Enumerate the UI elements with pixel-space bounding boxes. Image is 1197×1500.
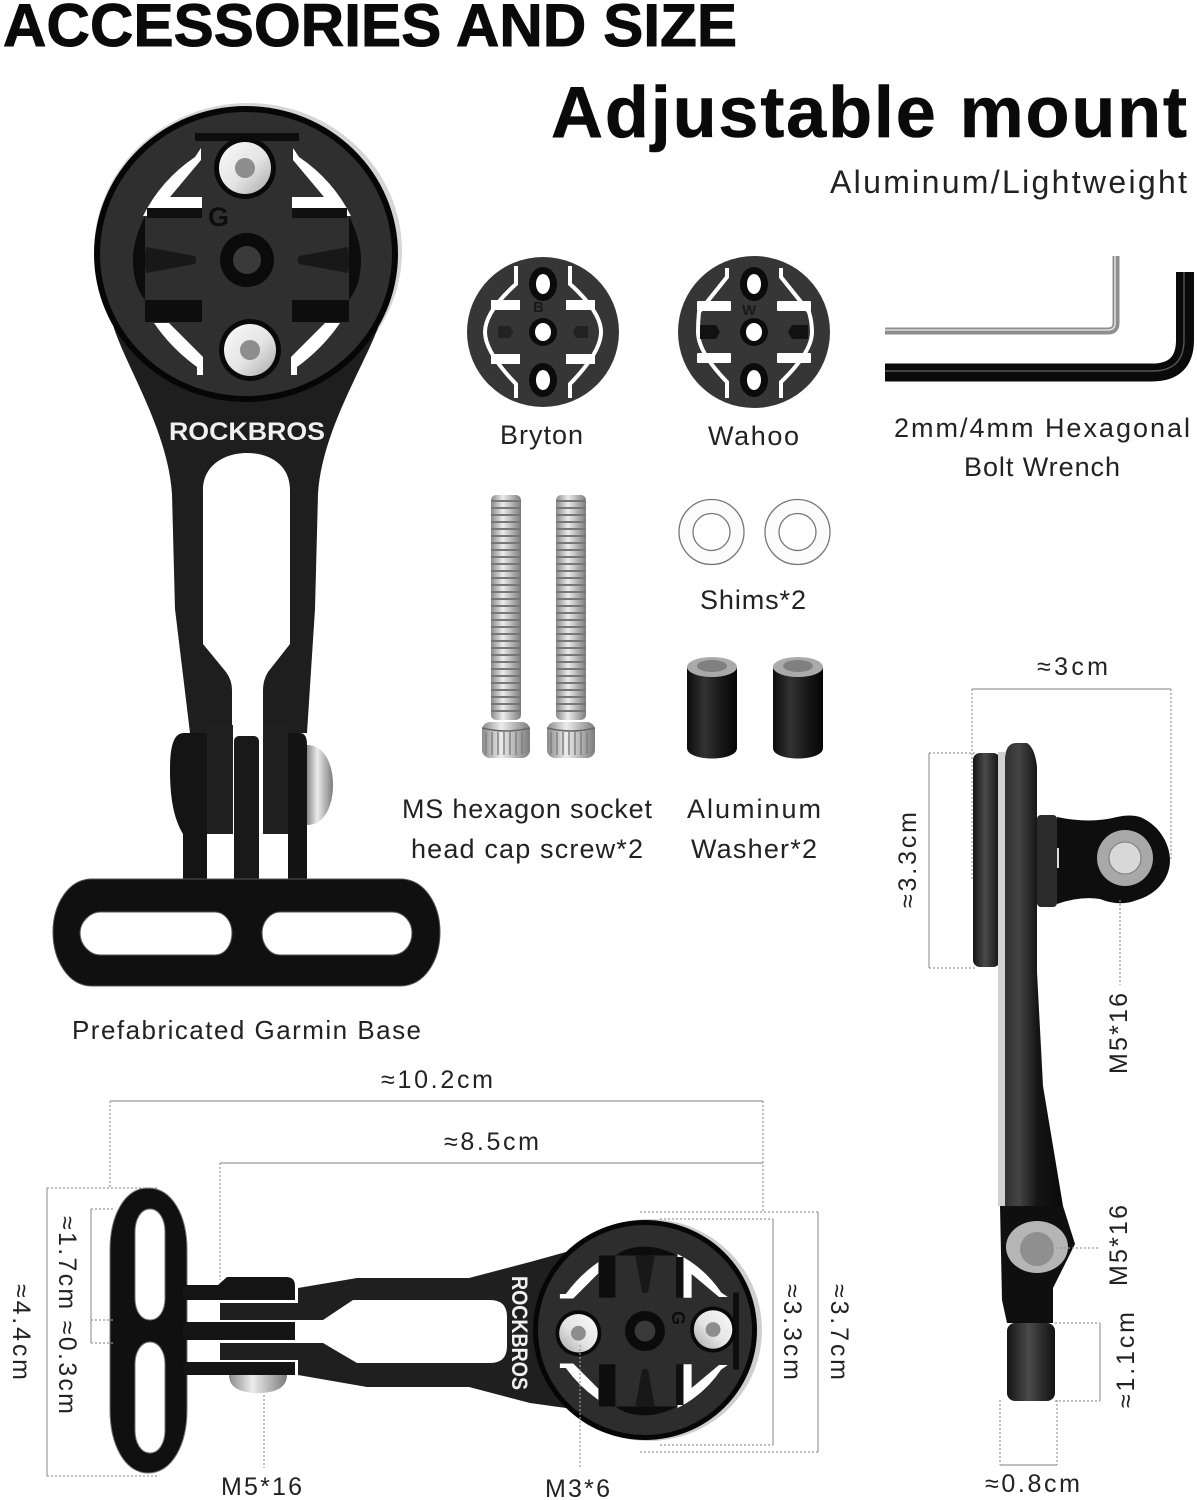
callout: M5*16 lower: M5*16 [1105,1205,1133,1286]
label: wrench: 2mm/4mm Hexagonal [894,413,1190,443]
accessory: Wahoo base [678,256,830,408]
label: Wahoo: Wahoo [708,421,799,451]
hinge clevis [170,725,333,886]
hinge lugs [183,1277,295,1393]
callout: M5*16 bottom [221,1395,302,1500]
dimension: 3.3cm side: ≈3.3cm [894,812,922,908]
dimension: 3cm [972,653,1171,880]
arm [220,1252,566,1408]
dimension: 1.7cm and 0.3cm [53,1209,115,1414]
base bar with slots [53,879,440,986]
accessory: hexagon socket screws [482,495,595,758]
caption: garmin base: Prefabricated Garmin Base [72,1015,421,1045]
label: washers: Aluminum [687,794,821,824]
dimension: 3.7cm width: ≈3.7cm [825,1284,853,1380]
slot window [203,453,290,760]
label: Bryton: Bryton [500,420,583,450]
label: shims: Shims*2 [700,585,806,615]
callout: M5*16 upper: M5*16 [1105,993,1133,1074]
dimension: 0.8cm [985,1400,1080,1498]
bar with slots [110,1188,187,1473]
label: washers [687,794,821,864]
text: G mark rotated: G [668,1311,688,1325]
dimension: 3.3cm width [660,1219,806,1445]
label: screws: MS hexagon socket [402,794,652,824]
dimension: 3.7cm width [640,1212,853,1452]
text: G mark: G [208,202,229,232]
accessory: aluminum washers [687,657,823,758]
dimension: 10.2cm [110,1066,763,1212]
accessory: shims [679,500,830,564]
dimension: 1.7cm and 0.3cm: ≈1.7cm ≈0.3cm [53,1216,81,1414]
product: main mount front view [53,103,440,986]
accessory: Bryton base [467,257,619,407]
disk [536,1219,762,1441]
label: screws [402,794,652,864]
product: bottom view mount [110,1188,762,1473]
label: screws: head cap screw*2 [411,834,643,864]
dimension: 0.8cm: ≈0.8cm [985,1470,1080,1498]
dimension: 4.4cm [7,1188,158,1476]
dimension: 3.3cm width: ≈3.3cm [778,1284,806,1380]
dimension: 10.2cm: ≈10.2cm [381,1066,493,1094]
label: wrench [894,413,1190,482]
dimension: 1.1cm [1055,1312,1140,1408]
logo: ROCKBROS rotated: ROCKBROS [507,1276,532,1390]
logo: ROCKBROS: ROCKBROS [169,418,325,446]
dimension: 3cm: ≈3cm [1037,653,1108,681]
heading: adjustable mount: Adjustable mount [551,73,1187,153]
dimension: 4.4cm: ≈4.4cm [7,1284,35,1380]
product: side view mount [973,743,1170,1401]
callout: M5*16 lower [1040,1205,1133,1286]
accessory: Bryton base: B [533,299,544,316]
lower joint [1000,1206,1075,1323]
mount lug [1057,816,1170,904]
label: washers: Washer*2 [691,834,817,864]
dimension: 3.3cm side [894,753,975,968]
accessory: Wahoo base: W [742,302,757,319]
accessory: hex wrenches [885,256,1185,372]
dimension: 1.1cm: ≈1.1cm [1112,1312,1140,1408]
subheading: Aluminum/Lightweight [830,164,1187,200]
label: wrench: Bolt Wrench [964,452,1120,482]
dimension: 8.5cm: ≈8.5cm [444,1128,539,1156]
